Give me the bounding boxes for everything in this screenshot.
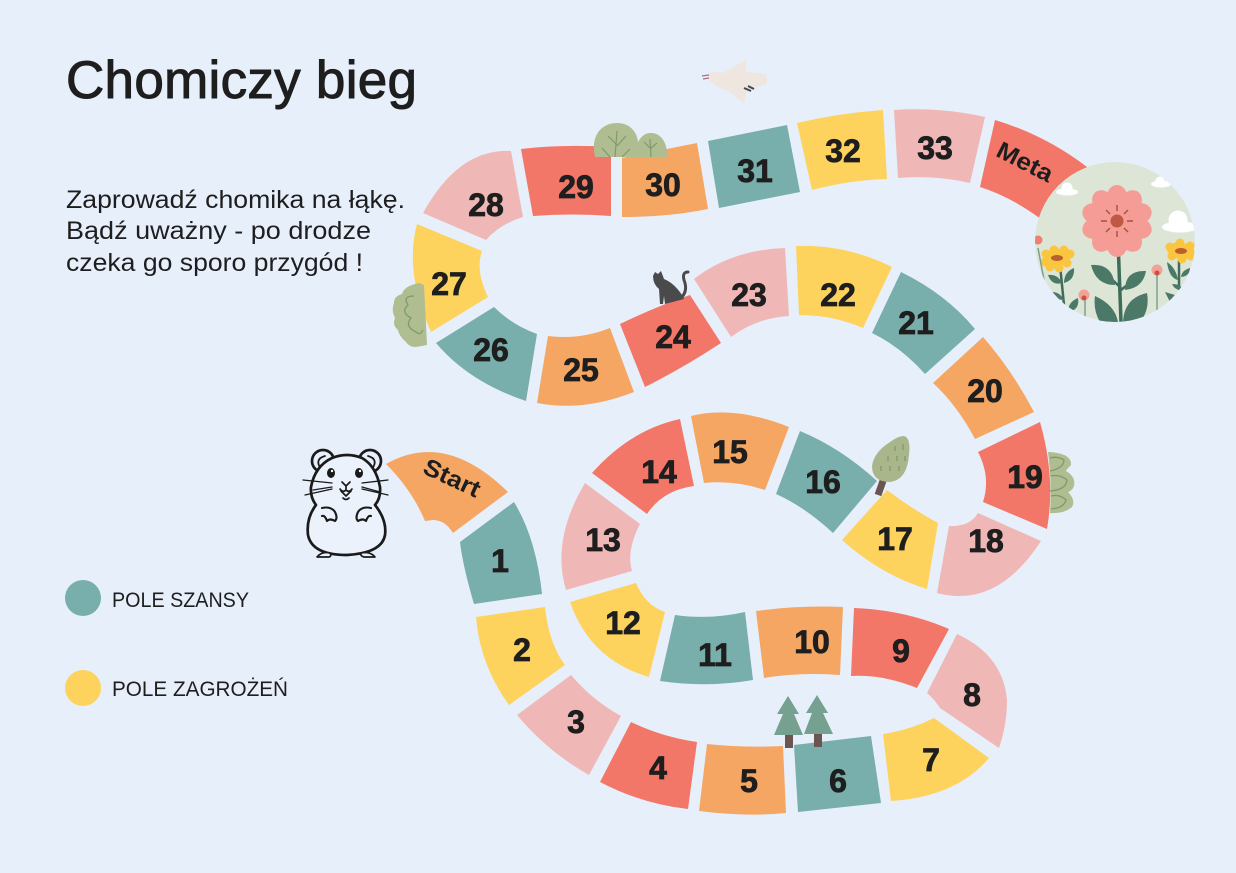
- field 23: 23: [731, 277, 767, 313]
- field 3: 3: [567, 704, 585, 740]
- field 12: [570, 583, 665, 677]
- hamster: [303, 450, 388, 557]
- field 1: 1: [491, 543, 509, 579]
- field 16: 16: [805, 464, 841, 500]
- field 25: [537, 328, 634, 406]
- legend: danger field: POLE ZAGROŻEŃ: [112, 678, 288, 701]
- field 15: 15: [712, 434, 748, 470]
- field 5: [699, 744, 786, 815]
- field 25: 25: [563, 352, 599, 388]
- field 17: [842, 490, 938, 589]
- field 13: [561, 483, 640, 590]
- tree between fields 16 and 17: [872, 436, 909, 495]
- field 18: [937, 513, 1041, 596]
- field 10: 10: [794, 624, 830, 660]
- bush beside field 19: [1048, 452, 1074, 513]
- field 32: [797, 110, 887, 190]
- pine trees above field 6: [774, 695, 833, 748]
- bird: [702, 59, 767, 104]
- field 19: 19: [1007, 459, 1043, 495]
- main flower: [1080, 185, 1154, 322]
- field 20: [933, 337, 1034, 439]
- field 14: [592, 419, 694, 514]
- clouds: [1056, 176, 1198, 232]
- field 4: [600, 722, 697, 809]
- field 27: [413, 224, 488, 332]
- field 15: [691, 412, 789, 490]
- field 7: 7: [922, 742, 940, 778]
- field 22: 22: [820, 277, 856, 313]
- field 26: [436, 307, 537, 401]
- field 8: 8: [963, 677, 981, 713]
- field 21: [872, 272, 975, 374]
- hamster eyes: [327, 468, 363, 478]
- field 18: 18: [968, 523, 1004, 559]
- left pine: [774, 696, 803, 748]
- left yellow flower: [1040, 246, 1078, 312]
- field 31: 31: [737, 153, 773, 189]
- field 5: 5: [740, 763, 758, 799]
- legend: chance field: POLE SZANSY: [112, 589, 249, 612]
- right pine: [804, 695, 833, 747]
- field 28: 28: [468, 187, 504, 223]
- field 26: 26: [473, 332, 509, 368]
- meadow flower circle: [1034, 162, 1198, 322]
- field 4: 4: [649, 750, 667, 786]
- cat: [653, 271, 688, 304]
- field 29: [521, 146, 611, 216]
- title: Chomiczy bieg: [66, 51, 417, 110]
- field 28: [423, 151, 523, 240]
- bush beside field 27: [393, 283, 427, 347]
- legend: chance field: [65, 580, 249, 616]
- field Start: [386, 452, 508, 533]
- field 19: [978, 422, 1050, 529]
- hamster ears: [312, 450, 381, 472]
- field 9: [851, 608, 949, 688]
- field 21: 21: [898, 305, 934, 341]
- field 14: 14: [641, 454, 677, 490]
- right yellow flower: [1166, 238, 1196, 290]
- intro text: [66, 186, 405, 277]
- infographic canvas: [65, 59, 1195, 815]
- field 24: [620, 295, 721, 387]
- field Meta: Meta: [992, 137, 1058, 188]
- field 12: 12: [605, 605, 641, 641]
- field 6: [794, 736, 881, 812]
- intro text: czeka go sporo przygód !: [66, 249, 363, 277]
- field 24: 24: [655, 319, 691, 355]
- hamster feet: [317, 552, 375, 557]
- field 27: 27: [431, 266, 467, 302]
- field 2: [476, 607, 565, 705]
- field 32: 32: [825, 133, 861, 169]
- hamster body: [308, 455, 385, 555]
- hamster whiskers: [303, 480, 388, 495]
- intro text: Zaprowadź chomika na łąkę.: [66, 186, 405, 214]
- field 9: 9: [892, 633, 910, 669]
- field 6: 6: [829, 763, 847, 799]
- field 16: [776, 431, 877, 533]
- game board path: [386, 109, 1087, 815]
- field 1: [460, 502, 542, 604]
- field 20: 20: [967, 373, 1003, 409]
- field 29: 29: [558, 169, 594, 205]
- field 7: [883, 718, 989, 801]
- field 22: [796, 246, 892, 328]
- field 33: 33: [917, 130, 953, 166]
- legend: danger field: [65, 670, 288, 706]
- field 31: [708, 125, 800, 208]
- small tulips: [1034, 236, 1175, 318]
- field 10: [756, 606, 843, 678]
- field 2: 2: [513, 632, 531, 668]
- field Meta: [980, 120, 1087, 222]
- field 30: 30: [645, 167, 681, 203]
- field 3: [517, 675, 621, 775]
- field 17: 17: [877, 521, 913, 557]
- field 11: [660, 612, 753, 684]
- legend: [65, 580, 288, 706]
- field 30: [622, 143, 708, 217]
- bush on fields 29 and 30: [594, 123, 667, 157]
- field 8: [927, 634, 1007, 748]
- field 13: 13: [585, 522, 621, 558]
- field 11: 11: [698, 637, 732, 673]
- hamster face: [340, 482, 352, 500]
- field 33: [894, 109, 985, 183]
- hamster paws: [322, 508, 371, 521]
- field Start: Start: [419, 454, 485, 503]
- intro text: Bądź uważny - po drodze: [66, 217, 371, 245]
- field 23: [694, 248, 789, 337]
